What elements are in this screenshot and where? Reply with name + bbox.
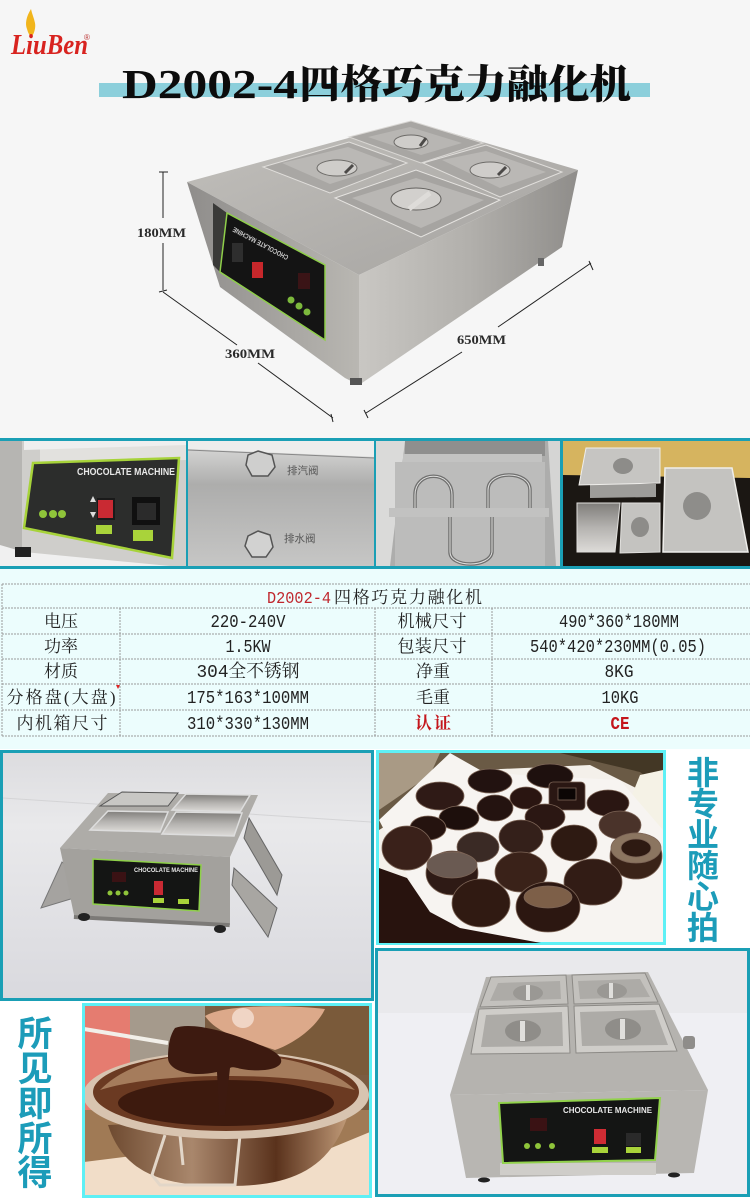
machine top <box>60 793 258 857</box>
wells and lid <box>90 792 250 836</box>
photo: control panel close-up: CHOCOLATE MACHINE <box>77 466 175 478</box>
header background <box>0 0 750 438</box>
machine left face <box>187 182 359 385</box>
photo: pans and lids <box>563 441 750 566</box>
backdrop tones <box>84 1005 132 1115</box>
side caption: 所见即所得: 所 <box>17 1015 53 1054</box>
row: inner box size / certification <box>16 714 630 735</box>
chocolates <box>382 764 662 932</box>
background counter <box>379 753 663 830</box>
control panel <box>93 859 201 911</box>
control panel <box>213 203 325 340</box>
row: power / package size: 1.5KW <box>226 638 271 658</box>
machine top surface <box>187 121 578 275</box>
brand name: LiuBen <box>10 29 88 61</box>
left lid <box>263 142 407 193</box>
side caption: 非专业随心拍: 随 <box>687 848 719 884</box>
icon: bolt upper <box>246 451 275 476</box>
row: voltage / machine size: 220-240V <box>210 613 286 633</box>
side caption: 所见即所得 <box>17 1015 53 1193</box>
photo: control panel close-up <box>0 441 186 566</box>
control panel: CHOCOLATE MACHINE <box>134 867 199 874</box>
lid: back right <box>572 973 658 1004</box>
control panel <box>499 1098 660 1163</box>
row: voltage / machine size: 490*360*180MM <box>559 613 679 633</box>
photo panel: machine with lids open <box>2 752 372 1000</box>
side caption: 非专业随心拍: 专 <box>687 786 719 822</box>
lid: front right <box>574 1004 677 1053</box>
side caption: 所见即所得: 即 <box>17 1085 53 1124</box>
dimension: height 180MM <box>137 172 186 292</box>
side caption: 所见即所得: 所 <box>17 1120 53 1159</box>
feet <box>478 1178 490 1182</box>
row: material / net weight <box>44 661 634 683</box>
white lower background <box>0 749 750 1200</box>
dark cloth <box>379 868 541 943</box>
foot shadows <box>350 378 362 385</box>
front lid <box>335 170 500 237</box>
logo: LiuBen <box>10 9 90 61</box>
dimension: width 360MM <box>163 292 333 422</box>
icon: side knob <box>683 1036 695 1049</box>
right lid <box>423 145 562 197</box>
row: material / net weight: 8KG <box>604 663 634 683</box>
row: voltage / machine size: 电压 <box>44 612 78 631</box>
dimension: width 360MM: 360MM <box>225 346 275 361</box>
strip frame <box>0 438 750 569</box>
dipping stick <box>84 1029 168 1043</box>
row: power / package size: 540*420*230MM(0.05) <box>530 638 706 658</box>
title <box>122 53 631 110</box>
side caption: 非专业随心拍 <box>687 755 719 946</box>
heating coils <box>415 475 530 564</box>
photo: heating element <box>376 441 560 566</box>
row: pan size / gross weight: 10KG <box>602 689 638 709</box>
side caption: 非专业随心拍: 心 <box>687 879 719 915</box>
coated piece and drip <box>168 1026 281 1115</box>
dimension: length 650MM: 650MM <box>457 332 506 347</box>
table background <box>2 584 750 736</box>
side caption: 所见即所得: 得 <box>17 1154 53 1193</box>
row: pan size / gross weight: 分格盘(大盘) <box>6 688 116 707</box>
photo panel: machine front view <box>376 950 748 1196</box>
row: pan size / gross weight: 毛重 <box>416 688 450 707</box>
row: pan size / gross weight: 175*163*100MM <box>187 689 309 709</box>
side caption: 非专业随心拍: 拍 <box>687 910 719 946</box>
title highlight bar <box>99 83 650 97</box>
lid: back left <box>480 975 568 1007</box>
row: material / net weight: 净重 <box>416 662 450 681</box>
specification table <box>2 583 750 736</box>
photo panel: chocolates <box>378 752 664 944</box>
cream cloth <box>84 1132 370 1196</box>
chocolate pool <box>118 1080 334 1126</box>
row: pan size / gross weight <box>6 685 638 709</box>
row: voltage / machine size <box>44 612 679 633</box>
right flaps <box>244 818 282 895</box>
row: power / package size: 包装尺寸 <box>398 637 466 656</box>
row: power / package size: 功率 <box>44 637 78 656</box>
control panel: CHOCOLATE MACHINE <box>563 1106 653 1115</box>
machine top surface <box>450 972 708 1095</box>
control panel: CHOCOLATE MACHINE <box>232 225 290 260</box>
side caption: 非专业随心拍: 业 <box>687 817 719 853</box>
registered mark: ® <box>84 33 90 42</box>
bowl body <box>108 1115 348 1186</box>
hand <box>205 1006 325 1050</box>
valve label: water: 排水阀 <box>284 531 316 546</box>
lid: front left <box>471 1006 570 1054</box>
row: material / net weight: 304全不锈钢 <box>196 661 300 683</box>
dimension: length 650MM <box>364 261 593 418</box>
machine front face <box>450 1090 708 1178</box>
row: material / net weight: 材质 <box>44 662 78 681</box>
table title: 四格巧克力融化机 <box>334 583 482 608</box>
row: inner box size / certification: 认证 <box>415 714 451 733</box>
side caption: 非专业随心拍: 非 <box>687 755 719 791</box>
photo panel: melted chocolate <box>82 1004 372 1198</box>
title: D2002-4 <box>122 61 298 107</box>
side caption: 所见即所得: 见 <box>17 1050 53 1089</box>
lower background: pale cyan band <box>0 438 750 750</box>
napkin and plate <box>379 753 663 942</box>
row: inner box size / certification: 内机箱尺寸 <box>16 714 108 733</box>
table title <box>267 583 482 609</box>
row: voltage / machine size: 机械尺寸 <box>398 612 466 631</box>
row: power / package size <box>44 637 706 658</box>
row: inner box size / certification: CE <box>610 715 630 735</box>
row: inner box size / certification: 310*330*130MM <box>187 715 309 735</box>
dimension: height 180MM: 180MM <box>137 225 186 240</box>
title: 四格巧克力融化机 <box>299 53 631 110</box>
machine front <box>60 848 230 925</box>
bowl rim and interior <box>83 1051 369 1139</box>
table title: D2002-4 <box>267 590 331 609</box>
left flap <box>41 862 74 908</box>
machine right face <box>359 170 578 385</box>
table grid <box>2 584 750 736</box>
stand wire <box>152 1135 240 1185</box>
photo strip <box>0 438 750 569</box>
icon: flame <box>26 9 35 38</box>
valve label: steam: 排汽阀 <box>287 463 318 478</box>
photo: valves <box>188 441 374 566</box>
product photo: four-pan machine <box>187 121 578 385</box>
back lid <box>349 121 483 163</box>
icon: bolt lower <box>245 531 273 557</box>
feet <box>78 913 90 921</box>
cyan frame <box>84 1004 370 1196</box>
